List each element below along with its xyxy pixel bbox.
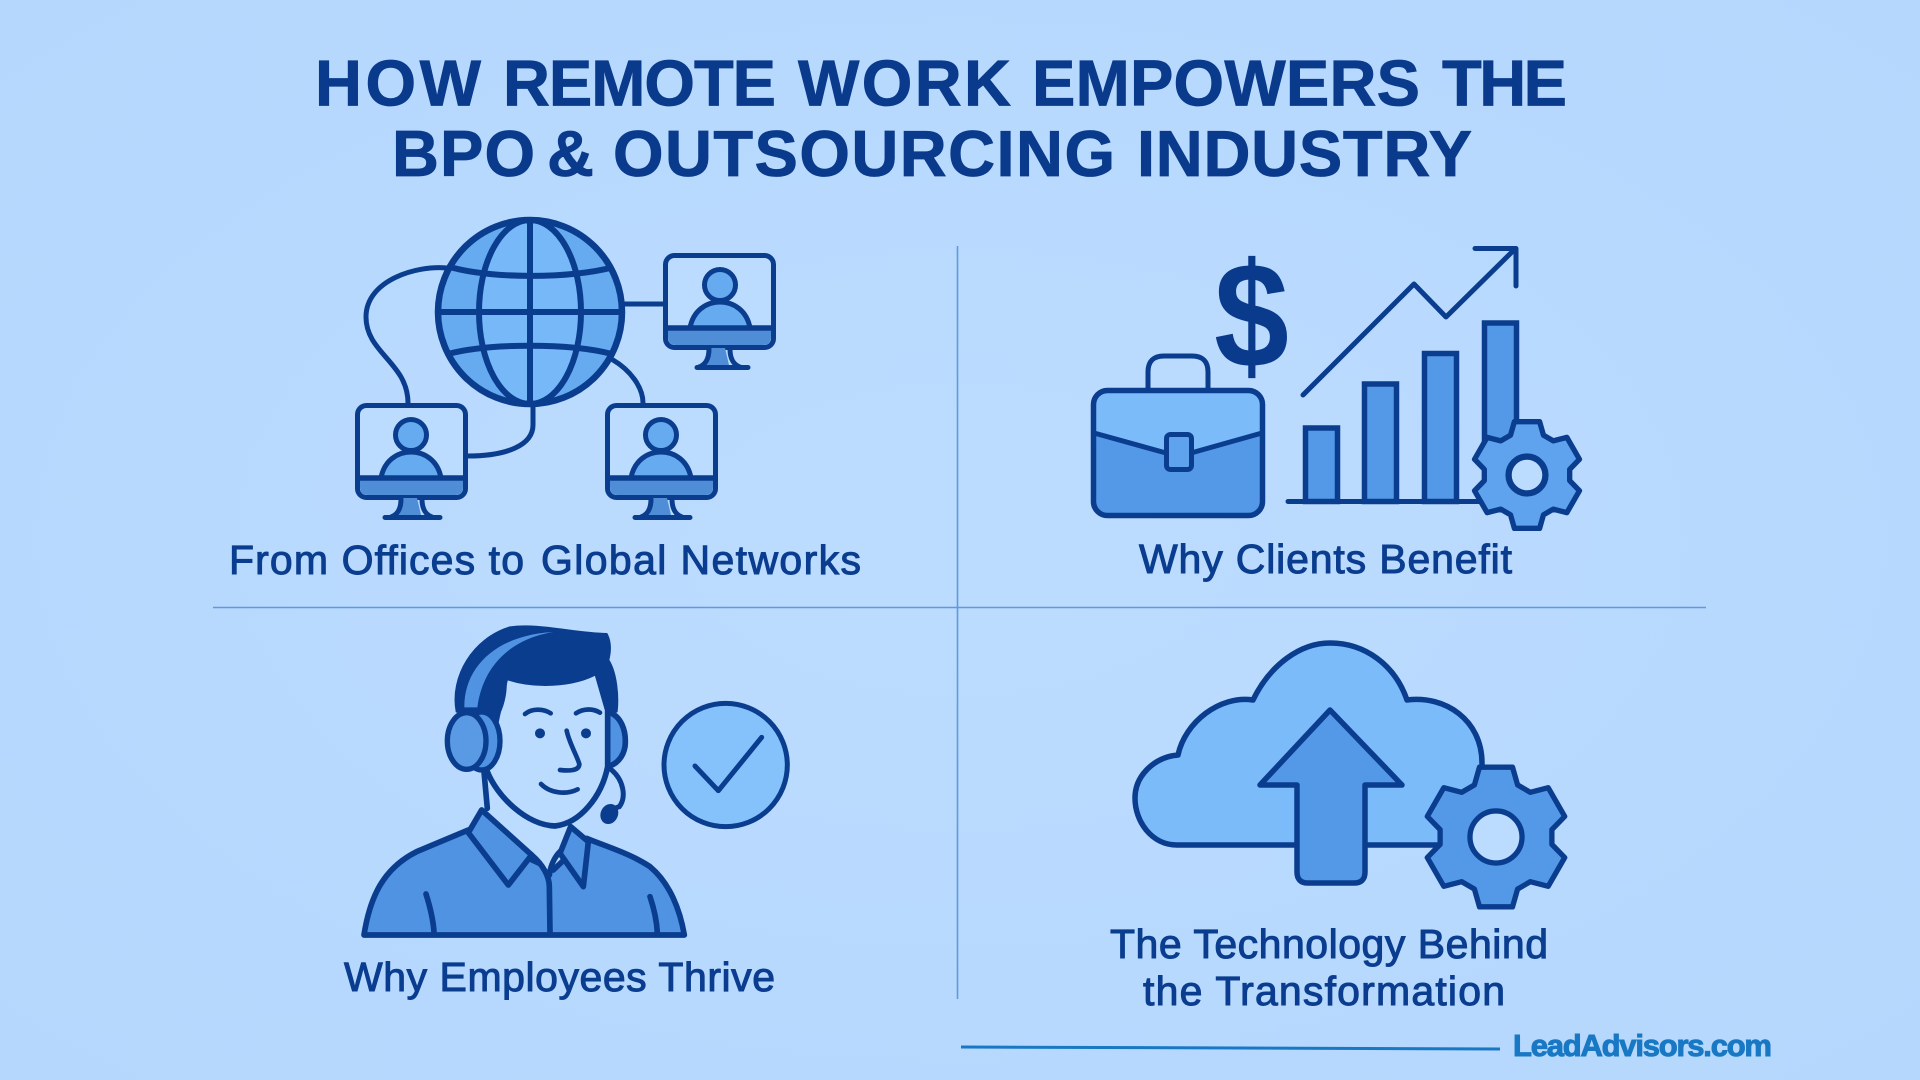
facial features	[525, 709, 600, 793]
icon: cloud	[1135, 643, 1482, 845]
title: REMOTE	[503, 46, 776, 120]
icon: monitor bottom middle	[608, 406, 716, 518]
footer: brand line and logo: LeadAdvisors.com	[1513, 1028, 1772, 1063]
icon: dollar sign: $	[1214, 232, 1289, 400]
label: the technology behind the transformation: The Technology Behind	[1110, 921, 1548, 967]
hair	[456, 626, 617, 718]
icon: briefcase	[1094, 356, 1262, 516]
icon: network connection lines	[366, 268, 663, 456]
title: EMPOWERS	[1032, 46, 1420, 120]
panel: the technology behind the transformation	[1110, 643, 1565, 1014]
title: OUTSOURCING	[613, 117, 1115, 190]
icon: monitor bottom left	[358, 406, 466, 518]
panel: why clients benefit	[1094, 232, 1579, 582]
title: &	[547, 117, 594, 190]
icon: gear	[1427, 767, 1565, 907]
collar	[426, 772, 657, 933]
icon: check mark badge	[664, 703, 787, 827]
title: WORK	[798, 46, 1011, 120]
title: HOW	[315, 46, 482, 120]
icon: gear	[1475, 422, 1579, 528]
infographic canvas	[213, 60, 1771, 1057]
panel: why employees thrive	[344, 626, 787, 1000]
label: from offices to global networks	[229, 537, 861, 583]
chart: rising bars	[1288, 323, 1516, 502]
title: INDUSTRY	[1137, 117, 1472, 190]
right ear cup	[607, 712, 625, 767]
face	[487, 672, 608, 826]
left ear cup	[463, 712, 500, 770]
icon: call-center agent with headset	[364, 626, 684, 935]
shirt	[364, 830, 684, 935]
label: from offices to global networks: From Offices to	[229, 537, 524, 583]
title: THE	[1442, 46, 1567, 120]
arrow: growth trend	[1303, 248, 1516, 395]
label: the technology behind the transformation: the Transformation	[1143, 968, 1505, 1014]
title: BPO	[392, 117, 535, 190]
panel: from offices to global networks	[229, 220, 861, 583]
arrow: upload	[1260, 710, 1402, 883]
icon: globe	[436, 220, 624, 404]
label: the technology behind the transformation	[1110, 921, 1548, 1014]
label: why employees thrive: Why Employees Thrive	[344, 954, 775, 1000]
label: from offices to global networks: Global Networks	[541, 537, 861, 583]
headband	[464, 632, 553, 707]
microphone	[610, 770, 623, 810]
icon: monitor top right	[666, 256, 774, 368]
label: why clients benefit: Why Clients Benefit	[1139, 536, 1513, 582]
title	[315, 46, 1567, 190]
neck and chest	[484, 773, 571, 875]
